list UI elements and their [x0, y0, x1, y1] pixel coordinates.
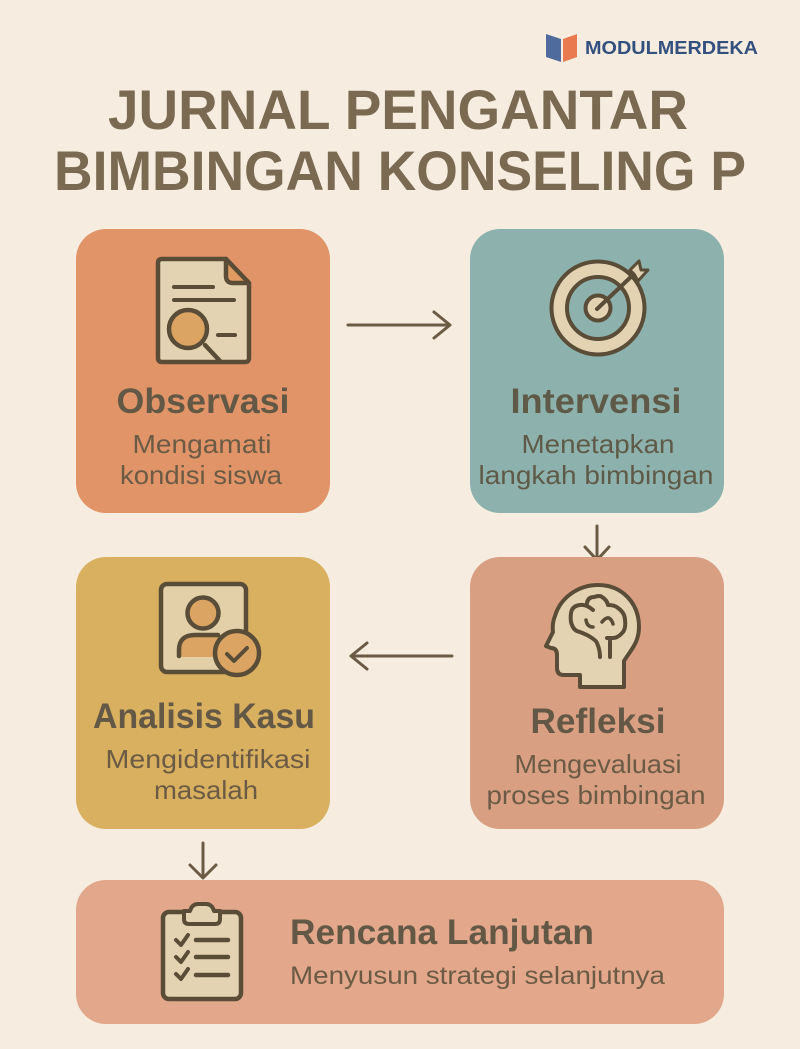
- description: [120, 429, 283, 490]
- description: [106, 744, 310, 805]
- description: Mengidentifikasi: [106, 744, 310, 774]
- title: JURNAL PENGANTAR: [108, 78, 688, 141]
- description: Mengevaluasi: [514, 749, 682, 779]
- description: [486, 749, 706, 810]
- description: Menetapkan: [522, 429, 674, 459]
- panel: Observasi: [76, 229, 330, 513]
- arrow: Refleksi to Analisis Kasu: [351, 643, 452, 669]
- description: kondisi siswa: [120, 460, 283, 490]
- icon: clipboard checklist: [163, 904, 241, 999]
- icon: profile with check: [161, 584, 259, 675]
- panel: Rencana Lanjutan: [76, 880, 724, 1024]
- icon: document with magnifier: [158, 259, 249, 362]
- heading: Rencana Lanjutan: [290, 913, 594, 952]
- heading: Intervensi: [510, 382, 682, 421]
- logo: ModulMerdeka: [546, 34, 758, 62]
- description: Mengamati: [132, 429, 272, 459]
- logo: ModulMerdeka: MODULMERDEKA: [585, 37, 758, 58]
- icon: target with arrow: [552, 261, 648, 354]
- panel: Intervensi: [470, 229, 724, 513]
- description: Menyusun strategi selanjutnya: [290, 962, 665, 990]
- description: proses bimbingan: [486, 780, 706, 810]
- heading: Refleksi: [530, 702, 666, 741]
- arrow: Observasi to Intervensi: [348, 312, 450, 338]
- heading: Observasi: [116, 382, 290, 421]
- description: langkah bimbingan: [478, 460, 714, 490]
- panel: Analisis Kasu: [76, 557, 330, 829]
- arrow: Analisis Kasu to Rencana Lanjutan: [190, 843, 216, 878]
- arrow: Intervensi to Refleksi: [585, 526, 609, 560]
- icon: head with brain: [546, 585, 639, 687]
- title: BIMBINGAN KONSELING P: [54, 139, 746, 202]
- title: [54, 78, 746, 202]
- heading: Analisis Kasu: [93, 697, 315, 736]
- description: masalah: [154, 775, 258, 805]
- description: [478, 429, 714, 490]
- panel: Refleksi: [470, 557, 724, 829]
